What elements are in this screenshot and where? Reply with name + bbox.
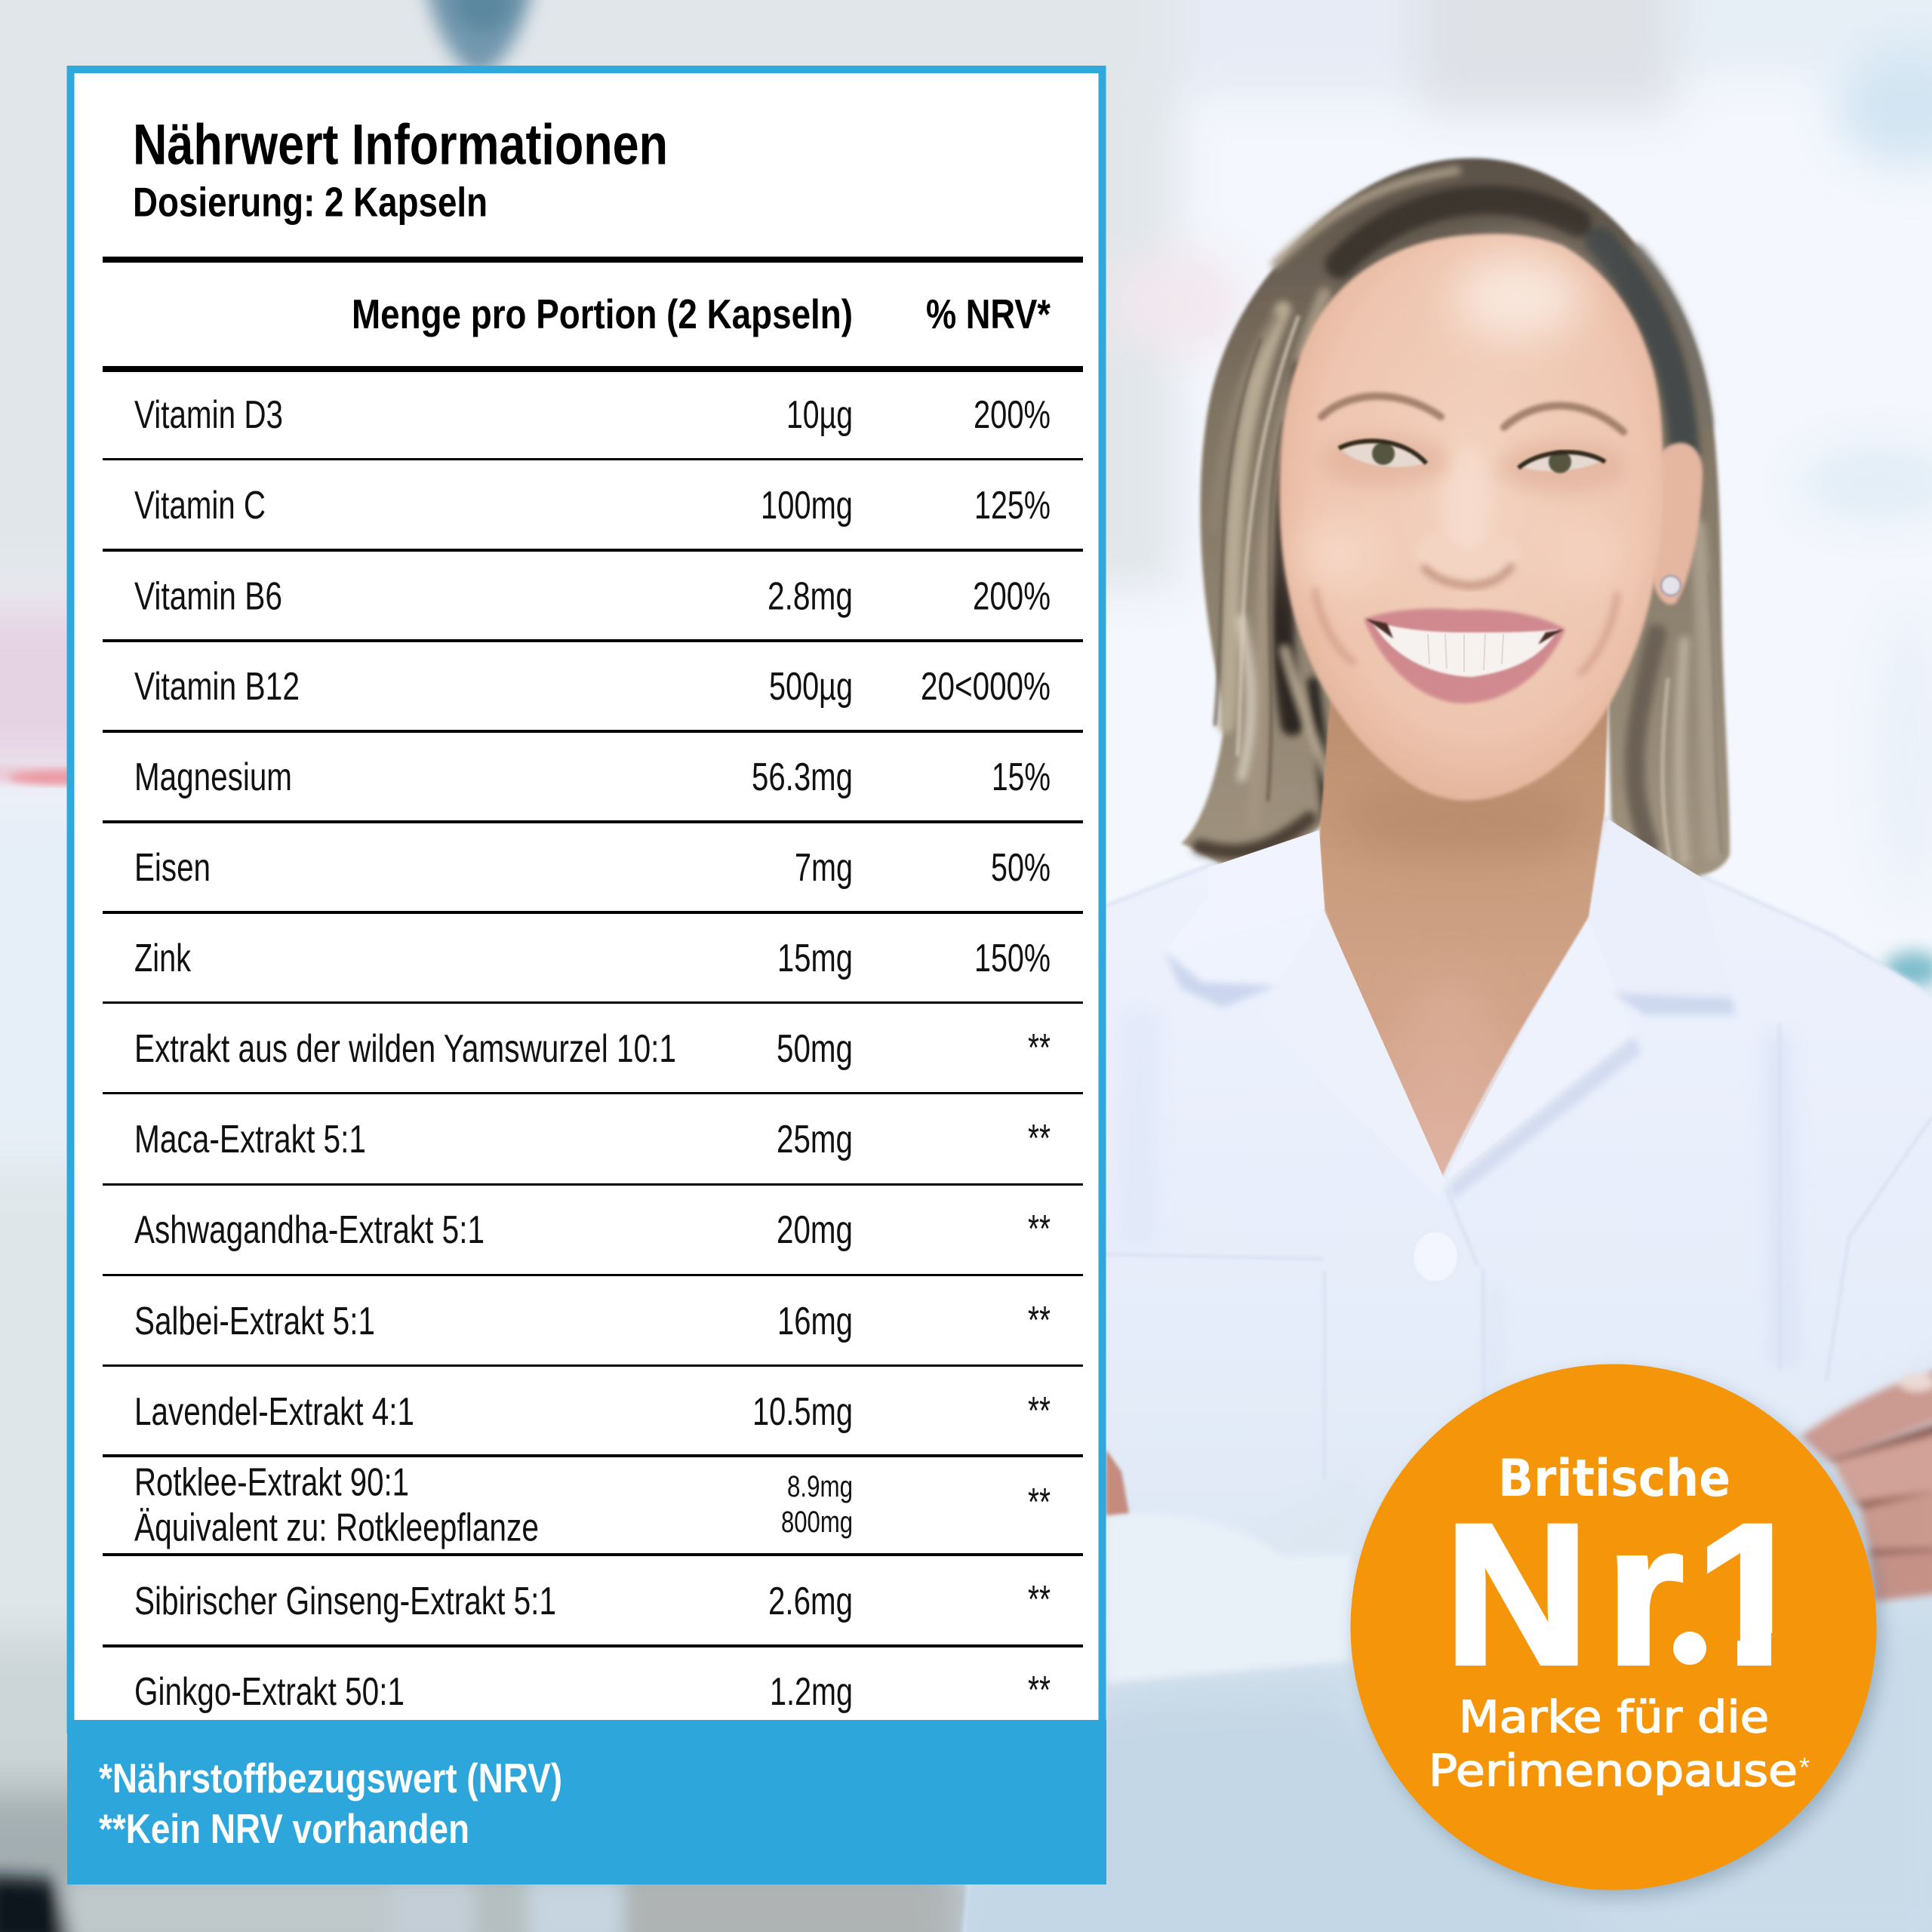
lab coat xyxy=(962,819,1932,1932)
table row: Vitamin B6: 2.8mg xyxy=(768,575,853,619)
ear and earring xyxy=(1653,443,1703,605)
table row: Vitamin B12: Vitamin B12 xyxy=(134,665,300,709)
table row: Salbei: 16mg xyxy=(777,1300,853,1343)
footnote bar xyxy=(67,1720,1106,1884)
orange masks rounding the dot and trimming the numeral foot xyxy=(1669,1623,1820,1669)
photo: woman in a lab coat xyxy=(962,158,1932,1932)
table row: Maca: Maca-Extrakt 5:1 xyxy=(134,1118,366,1161)
collar and lapels xyxy=(1165,819,1736,1200)
badge: Britische Nr.1: Britische xyxy=(1498,1449,1730,1509)
table row: Rotklee: 800mg xyxy=(781,1506,853,1539)
table row: Rotklee: 8.9mg xyxy=(787,1470,853,1503)
table row: Rotklee: Äquivalent zu: Rotkleepflanze xyxy=(134,1506,539,1550)
badge: Britische Nr.1: Marke für die xyxy=(1459,1691,1769,1743)
table row: Ginseng xyxy=(103,1578,1083,1647)
table row: Maca xyxy=(103,1117,1083,1186)
table row: Magnesium xyxy=(103,755,1083,823)
table row: Ginseng: Sibirischer Ginseng-Extrakt 5:1 xyxy=(134,1580,556,1623)
title: Nährwert Informationen xyxy=(133,113,668,177)
smile lines xyxy=(1315,589,1617,675)
table row: Vitamin C: Vitamin C xyxy=(134,484,266,528)
table row: Zink: 15mg xyxy=(777,937,853,980)
table row: Yamswurzel: 50mg xyxy=(777,1027,853,1071)
table row: Yamswurzel: Extrakt aus der wilden Yamswurzel 10:1 xyxy=(134,1027,676,1071)
badge: Britische Nr.1: * xyxy=(1799,1752,1810,1783)
panel frame xyxy=(71,69,1102,1730)
table row: Vitamin C: 125% xyxy=(974,484,1051,528)
table row: Salbei: Salbei-Extrakt 5:1 xyxy=(134,1300,375,1343)
table row: Magnesium: 56.3mg xyxy=(752,755,853,799)
table row: Eisen xyxy=(103,846,1083,914)
hair xyxy=(1181,158,1730,877)
table row: Ginkgo: ** xyxy=(1028,1669,1051,1712)
eyebrows xyxy=(1321,396,1623,432)
dosage subtitle: Dosierung: 2 Kapseln xyxy=(133,178,488,225)
badge: Britische Nr.1: Nr.1 xyxy=(1444,1483,1807,1706)
table row: Vitamin B6 xyxy=(103,575,1083,642)
table row: Vitamin B12: 20<000% xyxy=(921,665,1051,709)
table row: Rotklee: Rotklee-Extrakt 90:1 xyxy=(134,1461,409,1505)
table row: Vitamin C xyxy=(103,484,1083,552)
face xyxy=(1279,234,1663,801)
arms and hands xyxy=(1106,1370,1932,1601)
badge: Britische Nr.1: Perimenopause xyxy=(1429,1745,1798,1796)
table header: Menge pro Portion (2 Kapseln) xyxy=(352,291,853,337)
table row: Salbei: ** xyxy=(1028,1299,1051,1343)
table row: Vitamin B6: Vitamin B6 xyxy=(134,575,282,619)
table row: Ginkgo: 1.2mg xyxy=(770,1670,853,1714)
table row: Ashwagandha: 20mg xyxy=(777,1208,853,1252)
table row: Magnesium: Magnesium xyxy=(134,755,292,799)
table row: Magnesium: 15% xyxy=(992,755,1051,799)
table row: Vitamin D3: 10µg xyxy=(786,393,853,437)
table row: Ashwagandha xyxy=(103,1208,1083,1276)
table row: Salbei xyxy=(103,1299,1083,1367)
nose xyxy=(1416,534,1520,586)
dot of the Nr. mark xyxy=(1673,1632,1706,1665)
eyes xyxy=(1339,441,1605,473)
badge: Britische Nr.1 xyxy=(1351,1364,1882,1897)
table row: Vitamin C: 100mg xyxy=(761,484,853,528)
footnote bar: *Nährstoffbezugswert (NRV) xyxy=(99,1755,562,1801)
table row: Zink xyxy=(103,937,1083,1004)
table header: % NRV* xyxy=(926,291,1051,337)
table row: Ashwagandha: Ashwagandha-Extrakt 5:1 xyxy=(134,1208,485,1252)
table row: Maca: 25mg xyxy=(777,1118,853,1161)
coat button xyxy=(1413,1231,1458,1282)
table row: Ginkgo xyxy=(134,1669,1051,1714)
table row: Ashwagandha: ** xyxy=(1028,1208,1051,1251)
table row: Yamswurzel xyxy=(103,1026,1083,1094)
nutrition panel xyxy=(67,69,1106,1884)
table row: Vitamin B6: 200% xyxy=(973,575,1051,619)
table row: Zink: 150% xyxy=(974,937,1051,980)
table row: Lavendel: 10.5mg xyxy=(752,1390,853,1434)
mouth xyxy=(1364,608,1565,703)
table row: Maca: ** xyxy=(1028,1117,1051,1161)
table row: Rotklee xyxy=(103,1461,1083,1556)
table row: Vitamin B12: 500µg xyxy=(769,665,853,709)
table row: Vitamin D3 xyxy=(103,393,1083,460)
table row: Ginseng: 2.6mg xyxy=(768,1580,853,1623)
table row: Eisen: Eisen xyxy=(134,846,211,890)
table row: Eisen: 50% xyxy=(991,846,1051,890)
table row: Ginkgo: Ginkgo-Extrakt 50:1 xyxy=(134,1670,405,1714)
table row: Yamswurzel: ** xyxy=(1028,1026,1051,1070)
table row: Lavendel: ** xyxy=(1028,1389,1051,1433)
table row: Rotklee: ** xyxy=(1028,1481,1051,1524)
table row: Vitamin D3: 200% xyxy=(974,393,1051,437)
table header xyxy=(103,257,1083,372)
table row: Ginseng: ** xyxy=(1028,1578,1051,1622)
table row: Vitamin D3: Vitamin D3 xyxy=(134,393,283,437)
table row: Lavendel xyxy=(103,1389,1083,1457)
table row: Lavendel: Lavendel-Extrakt 4:1 xyxy=(134,1390,414,1434)
neck and chest xyxy=(1319,679,1609,1179)
footnote bar: **Kein NRV vorhanden xyxy=(99,1805,469,1852)
table row: Eisen: 7mg xyxy=(795,846,853,890)
table row: Zink: Zink xyxy=(134,937,192,980)
table row: Vitamin B12 xyxy=(103,665,1083,733)
